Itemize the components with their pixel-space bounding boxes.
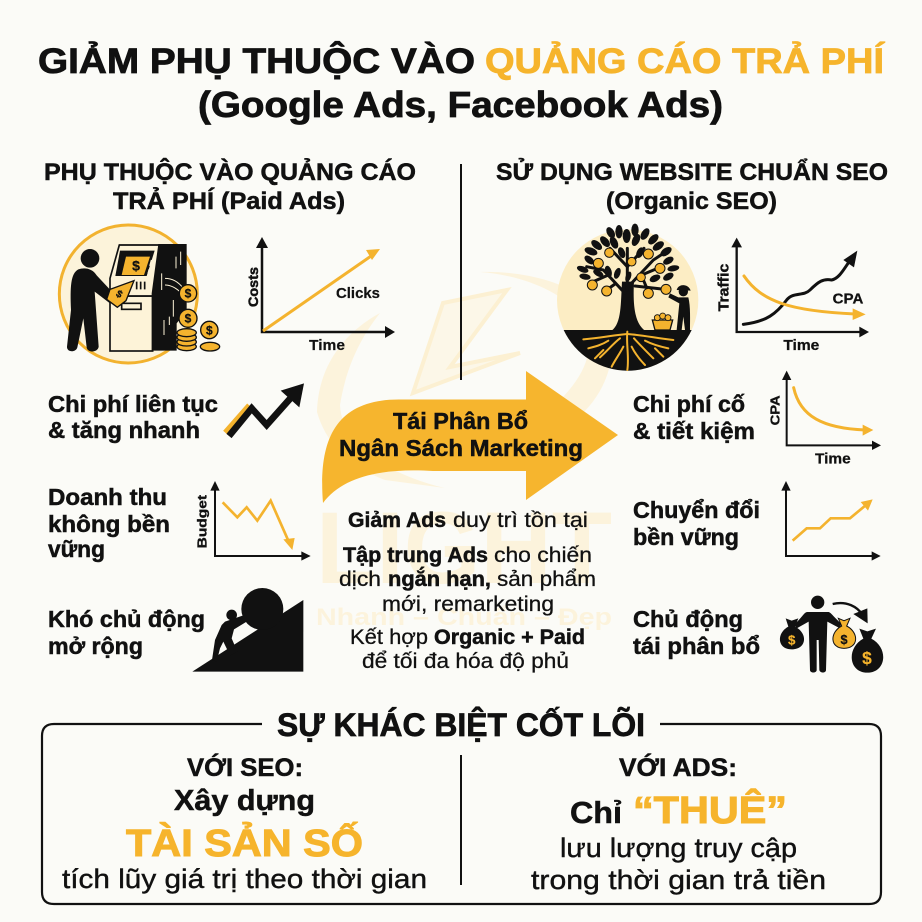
title: QUẢNG CÁO TRẢ PHÍ [485, 41, 885, 81]
text block: recommendations: Kết hợp [350, 626, 428, 649]
item: chi phí cố định: Chi phí cố [633, 391, 745, 417]
item: doanh thu không bền vững: Doanh thu [48, 484, 167, 510]
text block: recommendations: Tập trung Ads [343, 544, 488, 567]
icon: tree with roots and farmer [557, 224, 698, 371]
heading: core difference: SỰ KHÁC BIỆT CỐT LÕI [277, 707, 645, 743]
text block: recommendations: mới, remarketing [382, 593, 554, 616]
item: chủ động tái phân bổ [633, 606, 760, 659]
chart: costs vs time: Time [309, 338, 345, 354]
column: with Ads: “THUÊ” [633, 788, 787, 832]
item: chi phí liên tục: & tăng nhanh [48, 417, 200, 443]
text block: recommendations: cho chiến [494, 544, 592, 567]
panel: core difference [42, 707, 881, 904]
item: chi phí liên tục: Chi phí liên tục [48, 391, 218, 417]
chart: CPA falling: Time [815, 451, 851, 467]
watermark: logo LIGHT: Nhanh – Chuẩn – Đẹp [316, 604, 612, 631]
heading: paid ads [44, 157, 416, 215]
text block: recommendations [339, 509, 596, 673]
chart: budget falling [195, 481, 311, 561]
chart: conversions rising [781, 481, 881, 561]
item: chuyển đổi bền vững: bền vững [633, 524, 739, 550]
icon: person at ATM with coins: $ [132, 258, 140, 274]
watermark: logo LIGHT [316, 272, 612, 631]
icon: person at ATM with coins: $ [185, 287, 192, 301]
icon: person reallocating money bags: $ [788, 633, 796, 648]
column: with SEO: TÀI SẢN SỐ [126, 820, 363, 865]
icon: person at ATM with coins [59, 225, 220, 363]
column: with SEO: VỚI SEO: [187, 752, 303, 782]
icon: person reallocating money bags: $ [862, 648, 872, 668]
column: with Ads: Chỉ [570, 795, 622, 830]
column: with SEO: tích lũy giá trị theo thời gian [62, 864, 427, 894]
chart: traffic and CPA: CPA [833, 291, 864, 307]
column: with Ads: VỚI ADS: [619, 752, 737, 782]
item: chủ động tái phân bổ: tái phân bổ [633, 633, 760, 659]
title: (Google Ads, Facebook Ads) [198, 84, 723, 125]
column: with Ads: trong thời gian trả tiền [531, 865, 826, 895]
item: khó chủ động mở rộng: Khó chủ động [48, 606, 205, 632]
text block: recommendations: dịch [339, 568, 381, 591]
icon: person at ATM with coins: $ [114, 289, 124, 301]
item: chủ động tái phân bổ: Chủ động [633, 606, 743, 632]
item: chi phí cố định: & tiết kiệm [633, 418, 755, 444]
item: doanh thu không bền vững: không bền [48, 511, 170, 537]
item: chi phí liên tục [48, 391, 218, 443]
watermark: logo LIGHT: LIGHT [316, 491, 612, 605]
column: with Ads [531, 752, 826, 895]
chart: budget falling: Budget [195, 494, 209, 548]
chart: costs vs time [245, 237, 395, 354]
item: khó chủ động mở rộng [48, 606, 205, 659]
text block: recommendations: ngắn hạn, [388, 567, 491, 591]
icon: person pushing boulder uphill [192, 588, 303, 672]
item: chuyển đổi bền vững: Chuyển đổi [633, 497, 760, 523]
arrow: budget reallocation: Tái Phân Bổ [393, 408, 528, 434]
item: doanh thu không bền vững: vững [48, 536, 105, 562]
chart: traffic and CPA: Time [783, 338, 819, 354]
title: GIẢM PHỤ THUỘC VÀO [38, 41, 475, 81]
heading: organic seo: (Organic SEO) [606, 188, 777, 215]
item: chuyển đổi bền vững [633, 497, 760, 550]
text block: recommendations: Organic + Paid [434, 626, 585, 649]
column: with SEO [62, 752, 427, 894]
icon: person reallocating money bags: $ [840, 633, 848, 647]
title [38, 41, 885, 125]
text block: recommendations: Giảm Ads [348, 509, 446, 532]
icon: person at ATM with coins: $ [185, 312, 192, 326]
heading: organic seo: SỬ DỤNG WEBSITE CHUẨN SEO [496, 157, 888, 186]
arrow: budget reallocation: Ngân Sách Marketing [339, 435, 583, 461]
chart: costs vs time: Clicks [336, 286, 380, 302]
chart: CPA falling: CPA [767, 395, 782, 425]
item: doanh thu không bền vững [48, 484, 170, 562]
icon: person at ATM with coins: $ [206, 323, 213, 337]
column: with SEO: Xây dựng [174, 785, 315, 817]
item: chi phí cố định [633, 391, 755, 444]
chart: traffic and CPA [716, 238, 869, 354]
text block: recommendations: sản phẩm [497, 568, 596, 591]
heading: paid ads: TRẢ PHÍ (Paid Ads) [113, 186, 345, 215]
chart: traffic and CPA: Traffic [716, 264, 732, 311]
chart: CPA falling [767, 371, 881, 467]
text block: recommendations: để tối đa hóa độ phủ [362, 650, 569, 673]
heading: paid ads: PHỤ THUỘC VÀO QUẢNG CÁO [44, 157, 416, 186]
icon: person reallocating money bags [780, 596, 883, 673]
icon: rising zigzag arrow [226, 383, 304, 436]
item: khó chủ động mở rộng: mở rộng [48, 633, 143, 659]
arrow: budget reallocation [322, 371, 618, 503]
chart: costs vs time: Costs [245, 267, 261, 307]
heading: organic seo [496, 157, 888, 215]
text block: recommendations: duy trì tồn tại [453, 509, 588, 532]
column: with Ads: lưu lượng truy cập [560, 833, 797, 863]
